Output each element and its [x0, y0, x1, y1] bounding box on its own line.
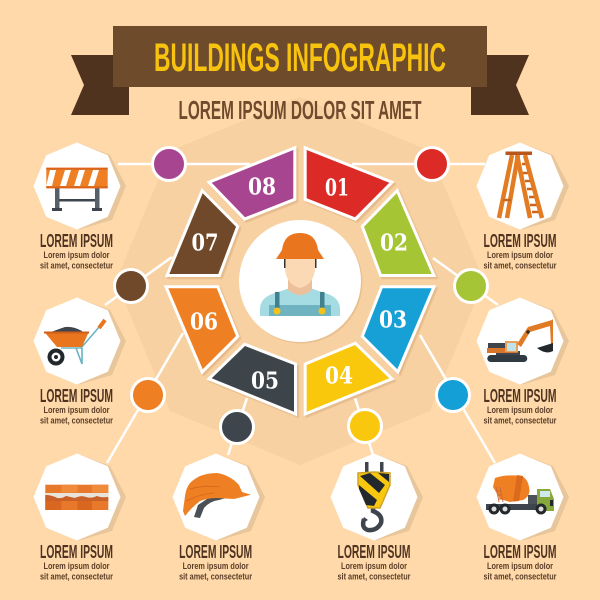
card: crane hook [330, 454, 423, 540]
label: card 5: Lorem ipsum dolor [341, 561, 407, 571]
label: card 2 [40, 386, 113, 426]
card: ladder [476, 142, 569, 230]
banner [71, 26, 529, 115]
label: card 3: LOREM IPSUM [40, 542, 113, 562]
label: card 3 [40, 542, 113, 582]
label: card 4: LOREM IPSUM [179, 542, 252, 562]
label: card 8: Lorem ipsum dolor [487, 405, 553, 415]
label: card 1: LOREM IPSUM [40, 231, 113, 251]
connector lines [105, 164, 498, 463]
label: card 7: sit amet, consectetur [484, 260, 557, 270]
dot 02 [454, 270, 488, 302]
label: card 7: Lorem ipsum dolor [487, 250, 553, 260]
dot 08 [152, 148, 186, 180]
card: mixer truck [476, 454, 569, 540]
label: card 2: Lorem ipsum dolor [44, 405, 110, 415]
segment 01 [307, 150, 389, 217]
dot 04 [348, 410, 382, 442]
segment 02 [364, 193, 432, 274]
segment 04 [307, 345, 389, 412]
icon: excavator [487, 319, 553, 362]
label: card 1: Lorem ipsum dolor [44, 250, 110, 260]
card: wheelbarrow [34, 298, 126, 384]
label: card 5: sit amet, consectetur [338, 572, 411, 582]
background octagon [116, 97, 484, 465]
card: excavator [476, 298, 569, 384]
label: card 4 [179, 542, 253, 582]
label: card 2: LOREM IPSUM [40, 386, 113, 406]
segment numbers [190, 174, 408, 394]
segment numbers: 02 [380, 230, 408, 256]
dot 03 [436, 378, 470, 412]
label: card 8 [484, 386, 557, 426]
icon: bricks [45, 485, 108, 510]
center worker icon [239, 220, 362, 344]
card: bricks [34, 454, 126, 540]
label: card 5 [338, 542, 411, 582]
icon: helmet [183, 473, 251, 518]
segment numbers: 01 [325, 174, 349, 202]
segment numbers: 03 [379, 306, 407, 334]
dot 06 [132, 378, 164, 412]
segment numbers: 08 [248, 174, 276, 200]
label: card 8: sit amet, consectetur [484, 416, 557, 426]
segment 08 [212, 150, 293, 217]
card: barrier [34, 142, 126, 230]
label: card 7 [484, 231, 557, 270]
segment numbers: 04 [325, 362, 353, 390]
card: helmet [172, 454, 265, 540]
label: card 4: sit amet, consectetur [179, 572, 253, 582]
icon: mixer truck [486, 475, 554, 514]
label: card 1 [40, 231, 113, 270]
dot 07 [114, 270, 148, 302]
segment 03 [364, 288, 432, 369]
icon: wheelbarrow [44, 320, 105, 366]
label: card 4: Lorem ipsum dolor [183, 561, 249, 571]
label: card 6: sit amet, consectetur [484, 572, 557, 582]
segment 06 [168, 288, 236, 369]
label: card 6: Lorem ipsum dolor [487, 561, 553, 571]
subtitle: LOREM IPSUM DOLOR SIT AMET [178, 97, 422, 125]
label: card 6 [484, 542, 557, 582]
connector dots [114, 148, 488, 444]
dot 01 [416, 148, 448, 180]
icon: barrier [46, 168, 108, 211]
segment 07 [169, 193, 236, 274]
icon: ladder [499, 152, 542, 218]
label: card 3: sit amet, consectetur [40, 572, 113, 582]
segment numbers: 07 [192, 230, 218, 256]
label: card 1: sit amet, consectetur [40, 260, 113, 270]
label: card 3: Lorem ipsum dolor [44, 561, 110, 571]
dot 05 [220, 410, 254, 444]
segment 05 [212, 346, 294, 412]
label: card 5: LOREM IPSUM [338, 542, 410, 562]
segment wheel [168, 150, 432, 412]
label: card 2: sit amet, consectetur [40, 416, 113, 426]
segment numbers: 05 [251, 368, 279, 394]
icon: crane hook [358, 462, 390, 530]
segment numbers: 06 [190, 308, 218, 336]
